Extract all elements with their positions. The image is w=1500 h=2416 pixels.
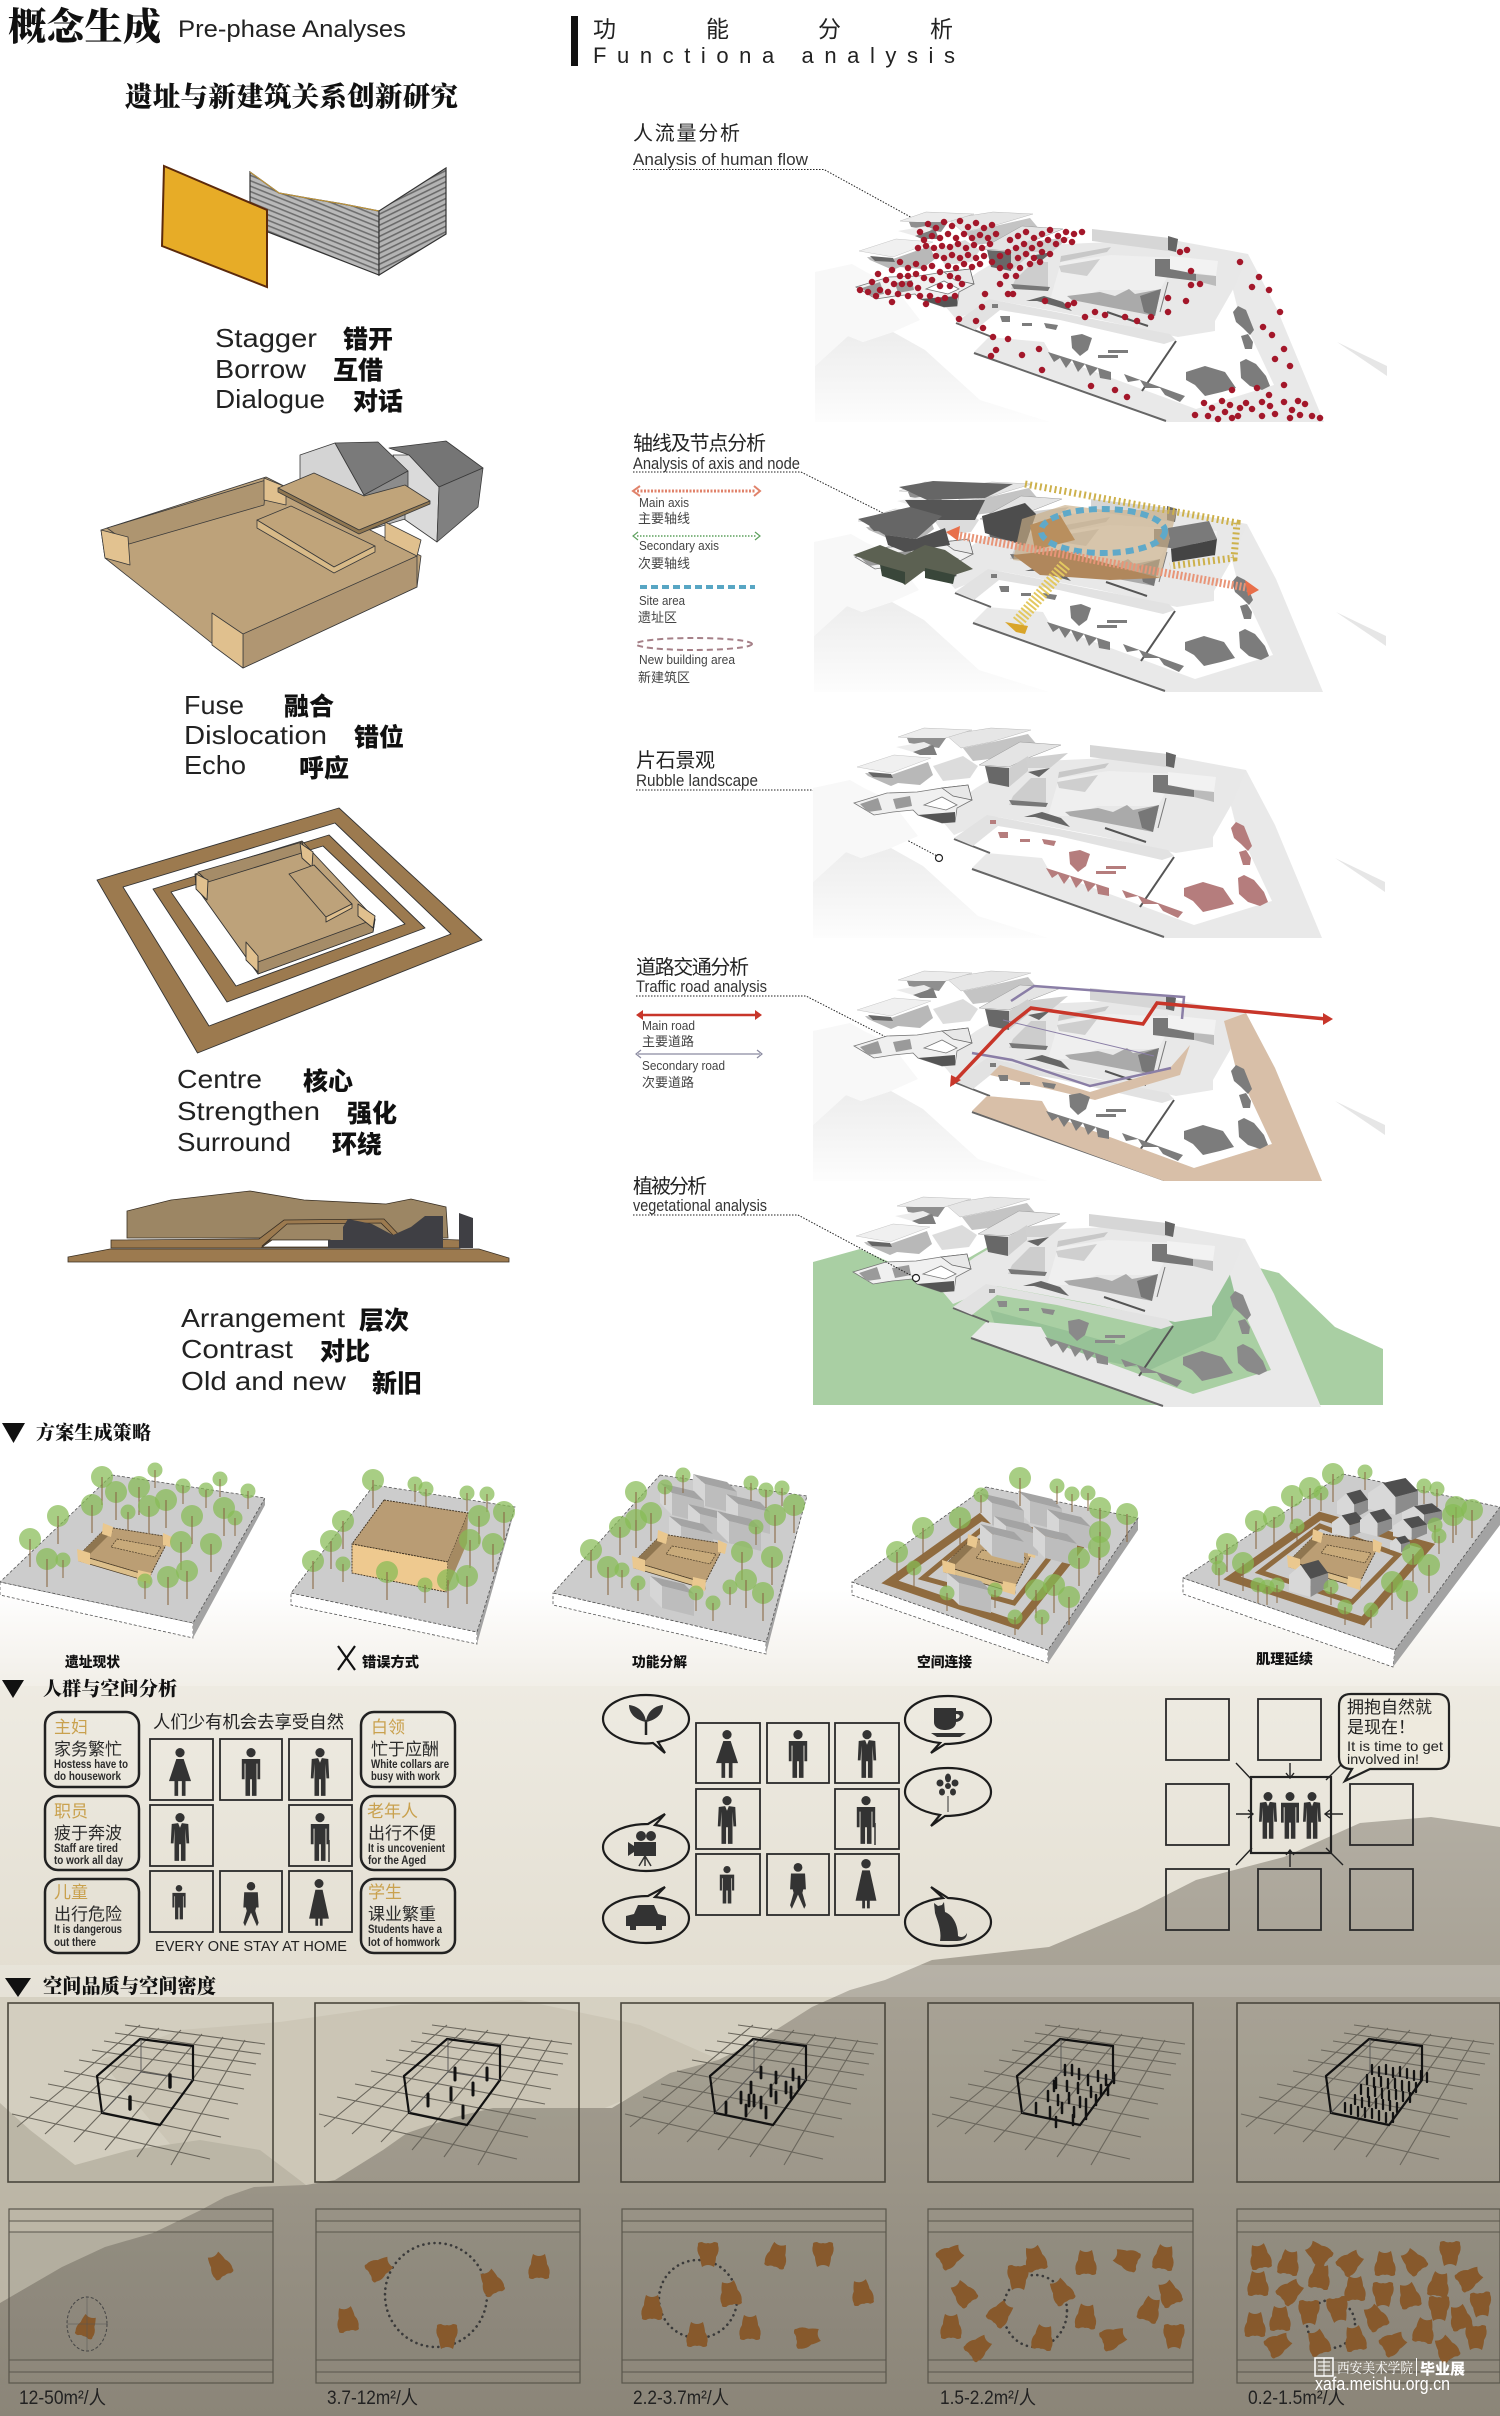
panel: site status model <box>0 1462 265 1638</box>
watermark: academy logo and url: 西安美术学院 <box>1337 2360 1413 2377</box>
text block: arrangement contrast old and new: 对比 <box>320 1338 370 1366</box>
label: wrong approach: 错误方式 <box>362 1654 419 1670</box>
text block: stagger borrow dialogue: Stagger <box>215 323 317 353</box>
panel: human flow analysis: Analysis of human flow <box>633 150 809 169</box>
text: nature caption: 人们少有机会去享受自然 <box>153 1712 344 1732</box>
heading: functional analysis: 能 <box>706 16 729 42</box>
panel: section model <box>68 1191 509 1262</box>
card: aged: for the Aged <box>368 1853 426 1867</box>
bubble: plant <box>603 1695 689 1753</box>
panel: wrong approach model <box>291 1469 515 1644</box>
chart: red people dots <box>860 221 1320 419</box>
heading: crowd and space analysis: 人群与空间分析 <box>43 1677 177 1700</box>
panel: rubble landscape: 片石景观 <box>636 749 715 772</box>
heading: functional analysis: 功 <box>593 16 616 42</box>
card: children: out there <box>54 1935 96 1949</box>
callout: time to get involved: 是现在！ <box>1347 1718 1415 1737</box>
text block: fuse dislocation echo <box>184 690 404 783</box>
text block: fuse dislocation echo: 呼应 <box>299 754 349 783</box>
label: space connection: 空间连接 <box>917 1654 972 1670</box>
legend: axis types <box>633 486 760 685</box>
chart: green vegetation area <box>813 1240 1383 1405</box>
panel: density 1.5-2.2: 1.5-2.2m²/人 <box>940 2387 1036 2409</box>
text block: fuse dislocation echo: Dislocation <box>184 720 327 750</box>
chart: axis overlay on site <box>853 481 1259 634</box>
legend: axis types: 新建筑区 <box>638 670 690 685</box>
panel: density 3.7-12 <box>315 2003 580 2409</box>
chart: rubble highlights <box>990 820 1268 918</box>
legend: axis types: 遗址区 <box>638 610 677 625</box>
panel: density 12-50: 12-50m²/人 <box>19 2387 106 2409</box>
card: student: Students have a <box>368 1922 442 1936</box>
panel: crowd cards and grid <box>45 1712 455 1955</box>
text block: arrangement contrast old and new: Arrangement <box>181 1303 346 1333</box>
heading: scheme strategy: 方案生成策略 <box>36 1421 151 1444</box>
panel: centre rings model <box>97 808 482 1053</box>
bubble: teacup <box>905 1696 991 1753</box>
label: function breakdown: 功能分解 <box>632 1654 687 1670</box>
card: staff: to work all day <box>54 1853 123 1867</box>
grid of stay-at-home figures <box>150 1739 352 1932</box>
panel: wishes grid with speech bubbles <box>603 1695 991 1946</box>
card: student: lot of homwork <box>368 1935 440 1949</box>
card: student <box>361 1879 455 1953</box>
title: 概念生成 <box>8 7 161 49</box>
card: staff: 职员 <box>54 1802 88 1821</box>
heading: functional analysis: 分 <box>818 16 841 42</box>
heading: space quality and density: 空间品质与空间密度 <box>43 1974 216 1998</box>
panel: traffic road analysis: Traffic road analysis <box>636 977 767 996</box>
panel: axis and node analysis: 轴线及节点分析 <box>633 432 766 455</box>
panel: density 3.7-12: 3.7-12m²/人 <box>327 2387 418 2409</box>
card: white collar: White collars are <box>371 1757 449 1771</box>
panel: axis and node analysis: Analysis of axis and node <box>633 454 800 473</box>
heading: relation research: 遗址与新建筑关系创新研究 <box>125 81 458 112</box>
text block: stagger borrow dialogue: 互借 <box>333 357 383 385</box>
panel: density 2.2-3.7 <box>621 2003 886 2409</box>
card: white collar: 忙于应酬 <box>371 1740 439 1759</box>
text block: stagger borrow dialogue: Borrow <box>215 354 306 384</box>
legend: axis types: Site area <box>639 593 686 608</box>
card: white collar <box>361 1712 455 1787</box>
panel: vegetation analysis: 植被分析 <box>633 1175 707 1198</box>
bubble: car <box>603 1887 689 1943</box>
heading: crowd and space analysis <box>2 1677 177 1700</box>
card: hostess: 家务繁忙 <box>54 1740 122 1759</box>
text block: fuse dislocation echo: Fuse <box>184 690 244 720</box>
card: aged: 老年人 <box>367 1802 418 1821</box>
card: staff: 疲于奔波 <box>54 1824 122 1843</box>
legend: axis types: Secondary axis <box>639 538 719 553</box>
watermark: academy logo and url: 毕业展 <box>1420 2361 1465 2378</box>
watermark: academy logo and url <box>1315 2358 1465 2394</box>
text block: centre strengthen surround: 强化 <box>347 1100 397 1128</box>
chart: roads overlay <box>950 986 1333 1181</box>
text block: arrangement contrast old and new <box>181 1303 422 1398</box>
text block: centre strengthen surround: 环绕 <box>332 1131 382 1159</box>
legend: road types: Main road <box>642 1018 695 1033</box>
legend: road types: 次要道路 <box>642 1075 694 1090</box>
text block: centre strengthen surround: 核心 <box>303 1067 353 1096</box>
panel: density 0.2-1.5 <box>1237 2003 1500 2409</box>
text block: arrangement contrast old and new: Contrast <box>181 1334 294 1364</box>
text block: centre strengthen surround <box>177 1064 397 1159</box>
card: white collar: 白领 <box>371 1718 405 1737</box>
label: texture continuation: 肌理延续 <box>1256 1651 1313 1667</box>
panel: density 0.2-1.5: 0.2-1.5m²/人 <box>1248 2387 1345 2409</box>
watermark: academy logo and url: xafa.meishu.org.cn <box>1315 2374 1450 2394</box>
panel: density 2.2-3.7: 2.2-3.7m²/人 <box>633 2387 729 2409</box>
text block: fuse dislocation echo: 融合 <box>284 693 334 721</box>
text block: stagger borrow dialogue: 错开 <box>343 326 393 354</box>
background and mountain wash <box>0 1590 1500 2416</box>
callout: time to get involved: 拥抱自然就 <box>1347 1698 1432 1717</box>
panel: get involved grid <box>1166 1694 1449 1930</box>
legend: axis types: Main axis <box>639 495 689 510</box>
text block: arrangement contrast old and new: Old and new <box>181 1366 346 1396</box>
card: hostess: 主妇 <box>54 1718 88 1737</box>
arrows: converge on centre <box>1236 1763 1343 1867</box>
panel: traffic road analysis <box>636 956 1385 1181</box>
legend: axis types: 次要轴线 <box>638 556 690 571</box>
panel: stagger wall diagram <box>162 166 446 287</box>
panel: texture continuation model <box>1183 1463 1500 1667</box>
legend: axis types: New building area <box>639 652 736 667</box>
heading: functional analysis <box>571 16 955 68</box>
text block: stagger borrow dialogue: Dialogue <box>215 384 325 414</box>
panel: traffic road analysis: 道路交通分析 <box>636 956 749 979</box>
card: white collar: busy with work <box>371 1769 440 1783</box>
subtitle: Pre-phase Analyses <box>178 16 406 43</box>
panel: human flow analysis <box>633 122 1387 422</box>
panel: function breakdown model <box>553 1468 807 1654</box>
callout: time to get involved: involved in! <box>1347 1751 1419 1767</box>
bubble: cat <box>905 1887 991 1946</box>
panel: fuse model <box>101 441 483 668</box>
heading: functional analysis: Functiona analysis <box>593 43 955 68</box>
callout: time to get involved: It is time to get <box>1347 1738 1443 1754</box>
panel: axis and node analysis <box>633 432 1386 692</box>
text block: arrangement contrast old and new: 层次 <box>359 1307 409 1335</box>
panel: rubble landscape: Rubble landscape <box>636 771 758 790</box>
card: hostess <box>45 1712 139 1787</box>
legend: road types: 主要道路 <box>642 1034 694 1049</box>
card: staff: Staff are tired <box>54 1841 118 1855</box>
text block: centre strengthen surround: Surround <box>177 1127 291 1157</box>
panel: vegetation analysis <box>633 1175 1383 1407</box>
card: children: 出行危险 <box>54 1905 122 1924</box>
card: staff <box>45 1796 139 1870</box>
legend: axis types: 主要轴线 <box>638 511 690 526</box>
figures grid <box>696 1723 899 1915</box>
card: student: 课业繁重 <box>368 1905 436 1924</box>
text: every one stay at home: EVERY ONE STAY AT HOME <box>155 1938 347 1955</box>
card: aged: It is uncovenient <box>368 1841 445 1855</box>
text block: stagger borrow dialogue <box>215 323 403 416</box>
text block: arrangement contrast old and new: 新旧 <box>372 1370 422 1398</box>
panel: vegetation analysis: vegetational analysis <box>633 1196 767 1215</box>
text block: fuse dislocation echo: 错位 <box>354 723 404 752</box>
heading: functional analysis: 析 <box>930 16 953 42</box>
card: children: 儿童 <box>54 1883 88 1902</box>
text block: centre strengthen surround: Centre <box>177 1064 262 1094</box>
panel: density 12-50 <box>8 2003 273 2409</box>
panel: rubble landscape <box>636 728 1385 938</box>
bubble: camera <box>603 1814 689 1871</box>
panel: density 1.5-2.2 <box>928 2003 1193 2409</box>
card: student: 学生 <box>368 1883 402 1902</box>
bubble: flower <box>905 1768 991 1826</box>
label: site status: 遗址现状 <box>64 1654 120 1670</box>
figures: three people <box>1259 1792 1321 1839</box>
panel: space connection model <box>852 1467 1138 1663</box>
legend: road types: Secondary road <box>642 1058 725 1073</box>
legend: road types <box>636 1010 762 1090</box>
panel: human flow analysis: 人流量分析 <box>633 122 740 145</box>
text block: centre strengthen surround: Strengthen <box>177 1096 320 1126</box>
callout: time to get involved <box>1339 1694 1449 1781</box>
card: hostess: do housework <box>54 1769 121 1783</box>
text block: fuse dislocation echo: Echo <box>184 750 246 780</box>
text block: stagger borrow dialogue: 对话 <box>353 388 403 416</box>
card: aged <box>361 1796 455 1870</box>
card: children: It is dangerous <box>54 1922 122 1936</box>
label: wrong approach <box>338 1646 419 1670</box>
card: aged: 出行不便 <box>368 1824 436 1843</box>
card: children <box>45 1879 139 1953</box>
card: hostess: Hostess have to <box>54 1757 128 1771</box>
